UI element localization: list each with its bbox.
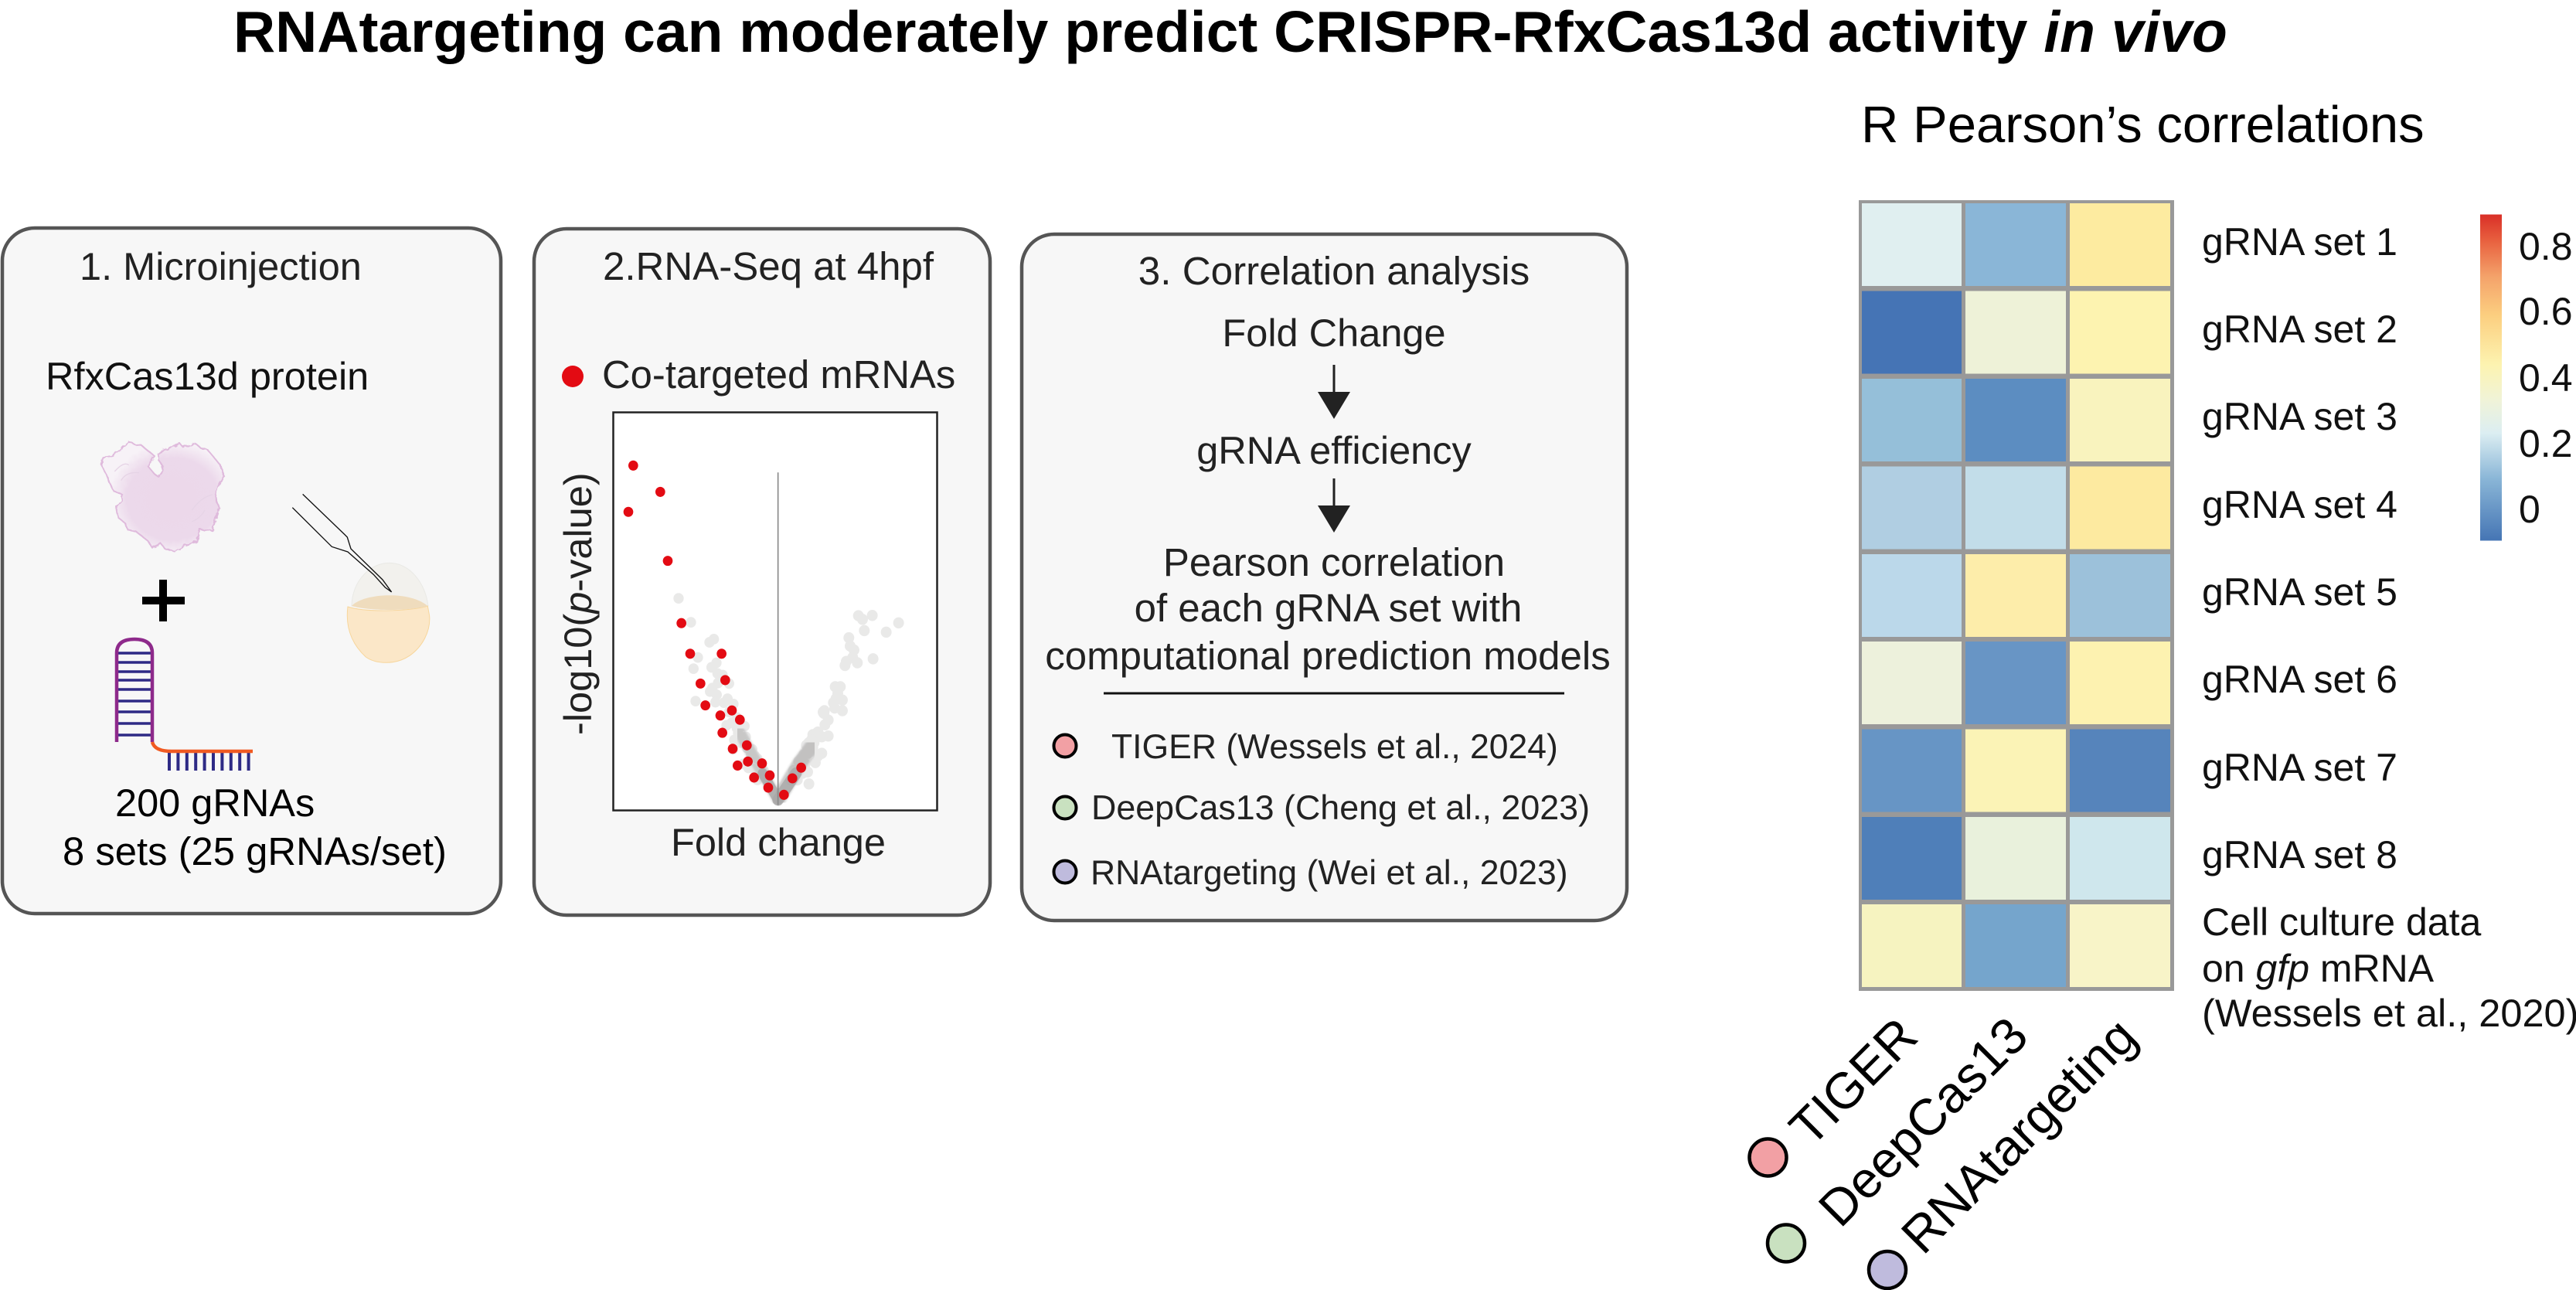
row labels [2202, 220, 2576, 1035]
colour scale legend: 0 [2519, 488, 2540, 531]
icon: plus sign [142, 580, 185, 621]
row labels: gRNA set 6 [2202, 658, 2397, 701]
colour scale legend [2480, 215, 2573, 541]
legend item: TIGER: TIGER (Wessels et al., 2024) [1111, 728, 1558, 766]
label: 8 sets: 8 sets (25 gRNAs/set) [63, 829, 447, 873]
step: Pearson correlation text: Pearson correlation [1163, 540, 1505, 584]
legend item: RNAtargeting: RNAtargeting (Wei et al., 2023) [1091, 854, 1568, 892]
label: RfxCas13d protein: RfxCas13d protein [46, 354, 369, 398]
row labels: on gfp mRNA [2202, 947, 2435, 990]
colour scale legend: 0.4 [2519, 356, 2573, 400]
row labels: gRNA set 2 [2202, 308, 2397, 351]
heatmap heading: R Pearson’s correlations [1861, 96, 2425, 154]
column label: DeepCas13: DeepCas13 [1808, 1006, 2038, 1237]
row labels: gRNA set 3 [2202, 395, 2397, 438]
row labels: gRNA set 8 [2202, 833, 2397, 876]
column label: TIGER: TIGER [1778, 1007, 1928, 1156]
arrow: gRNA efficiency to Pearson correlation [1318, 478, 1350, 533]
panel: RNA-Seq [534, 229, 990, 915]
title: RNAtargeting can moderately predict CRISPR-RfxCas13d activity in vivo [233, 0, 2227, 64]
chart: volcano plot [556, 413, 937, 864]
legend: prediction models [1054, 728, 1590, 892]
row labels: gRNA set 4 [2202, 483, 2397, 526]
legend item: DeepCas13: DeepCas13 (Cheng et al., 2023) [1091, 788, 1590, 827]
colour scale legend: 0.8 [2519, 225, 2573, 268]
column label: RNAtargeting: RNAtargeting [1890, 1007, 2147, 1264]
colour scale legend: 0.6 [2519, 290, 2573, 333]
legend: co-targeted mRNAs: Co-targeted mRNAs [602, 352, 955, 397]
row labels: Cell culture data [2202, 900, 2481, 944]
icon: injected embryo with needle [292, 494, 430, 662]
heading: 1. Microinjection: 1. Microinjection [80, 244, 362, 288]
panel: microinjection [2, 228, 501, 914]
step: Pearson correlation text: computational prediction models [1045, 634, 1611, 678]
label: 200 gRNAs: 200 gRNAs [115, 781, 315, 825]
step: gRNA efficiency: gRNA efficiency [1196, 428, 1472, 472]
row labels: gRNA set 1 [2202, 220, 2397, 264]
icon: RfxCas13d protein blob [102, 442, 224, 551]
y-axis label: -log10(p-value) [556, 472, 600, 735]
column labels [1750, 1006, 2147, 1288]
icon: guide RNA hairpin [116, 639, 253, 771]
x-axis label: Fold change [671, 820, 886, 864]
row labels: (Wessels et al., 2020) [2202, 991, 2576, 1035]
step: Pearson correlation text: of each gRNA set with [1135, 586, 1522, 630]
arrow: fold change to gRNA efficiency [1318, 365, 1350, 419]
heading: 2.RNA-Seq at 4hpf: 2.RNA-Seq at 4hpf [603, 244, 934, 288]
chart: correlation heatmap [1859, 200, 2174, 991]
divider line [1104, 693, 1564, 694]
heading: 3. Correlation analysis: 3. Correlation analysis [1138, 249, 1530, 293]
step: Fold Change: Fold Change [1222, 311, 1446, 355]
row labels: gRNA set 7 [2202, 746, 2397, 789]
colour scale legend: 0.2 [2519, 422, 2573, 465]
panel: correlation analysis [1022, 234, 1627, 921]
row labels: gRNA set 5 [2202, 570, 2397, 614]
